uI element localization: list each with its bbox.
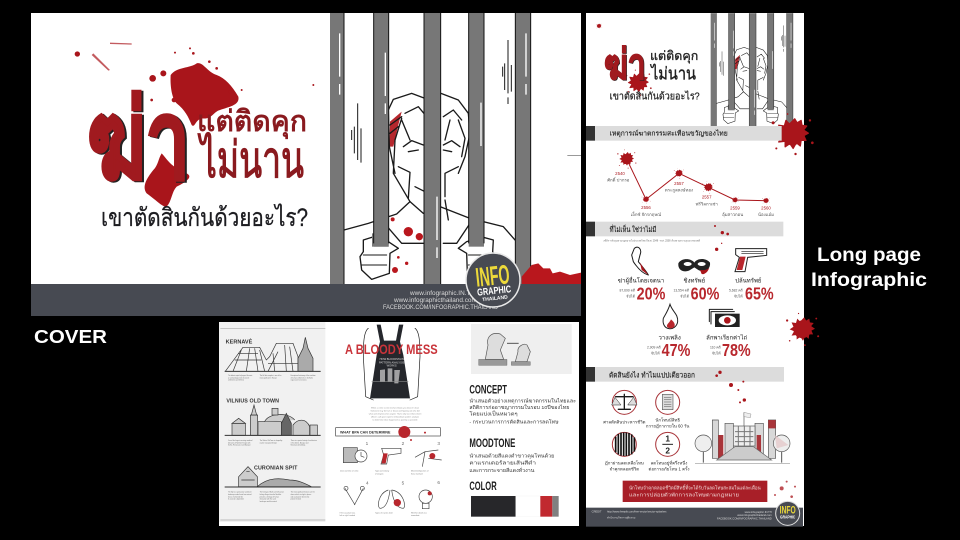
long page footer: www.infographic.IN.TH (745, 510, 772, 514)
intro text (369, 406, 422, 421)
sample: Lithuania heritage sites: One of the largest surviving medieval (228, 439, 253, 442)
sample: a bloody mess: immediate (411, 514, 419, 517)
sample: a bloody mess: 1 (366, 441, 369, 446)
hero title kill: ฆ่า (604, 40, 646, 87)
illustration: prison building (695, 412, 790, 463)
stat: armed robbery: 65% (745, 283, 774, 303)
caption: life sentence: จำคุกตลอดชีวิต (610, 466, 639, 472)
long page footer (586, 501, 803, 527)
stat: armed robbery (729, 277, 774, 303)
icon: mask (678, 259, 710, 274)
moodtone text: และการกระจายสีแดงทั่วงาน (469, 467, 535, 474)
sample: Lithuania heritage sites (219, 322, 325, 522)
cover logo badge: GRAPHIC (477, 284, 512, 299)
sample: Lithuania heritage sites: most significant in Europe (260, 376, 277, 379)
stat: robbery (673, 277, 719, 303)
caption: death sentence: ศาลตัดสินประหารชีวิต (603, 419, 646, 424)
section 2 note: สถิติการจับกุมตามกฎหมายในประเทศไทย ปีพ.ศ. 2548 - พ.ศ. 2558 เรียงตามความรุนแรงของคดี (603, 239, 700, 244)
what BPA can determine bar: WHAT BPA CAN DETERMINE (340, 430, 391, 434)
stat: arson: 2,909 คดี (647, 344, 661, 349)
panel: long page infographic (586, 13, 819, 527)
sample: Lithuania heritage sites: and coastal pine forests that (291, 495, 310, 498)
sample: a bloody mess: left or right handed (340, 514, 355, 517)
intro text: Someone may be hurt or dead, and figuring out who did (371, 409, 419, 412)
color heading: COLOR (469, 479, 497, 493)
sample: Lithuania heritage sites: old towns of Northern Europe with (228, 441, 251, 444)
cover title: line 2: ไม่นาน (197, 132, 304, 188)
sample: Lithuania heritage sites: interaction with the sand (260, 498, 276, 501)
sample: Lithuania heritage sites: forces of wind and tide (228, 495, 243, 498)
intro text: When a crime scene involves blood, you know it's bad. (371, 406, 419, 409)
intro text: to determine what happened as quickly as possible (373, 418, 418, 421)
Curonian illustration (225, 467, 321, 487)
concept text: นำเสนอตัวอย่างเหตุการณ์ฆาตกรรมในไทยและ (469, 398, 576, 405)
sample: a bloody mess: HOW BLOODSTAIN (380, 357, 404, 361)
Vilnius illustration (232, 405, 317, 435)
colour swatches (471, 496, 559, 517)
sample: Lithuania heritage sites: period is a heritage of human (260, 495, 279, 498)
concept text: สถิติการก่ออาชญากรรมในรอบ 10ปีของไทย (469, 404, 569, 411)
Kernave heading: KERNAVĖ (226, 338, 253, 345)
intro text: what and why becomes urgent. That's why law enforcement (369, 412, 422, 415)
sample: Lithuania heritage sites: The heritage of Baltic and Lithuanian (260, 491, 284, 494)
sample: a bloody mess: those involved (411, 472, 423, 475)
section 2 header: ที่ไม่เห็น ใช่ว่าไม่มี (610, 224, 656, 234)
stat: armed robbery: จับได้ (734, 294, 743, 299)
sample: a bloody mess: PATTERN ANALYSIS (379, 360, 405, 364)
Vilnius heading: VILNIUS OLD TOWN (226, 399, 279, 405)
long page footer: CREDIT (592, 509, 602, 513)
sample: Lithuania heritage sites: The hill fort complex is one of the (260, 374, 282, 377)
Kernave illustration (225, 337, 321, 371)
what BPA can determine bar (336, 426, 440, 441)
concept text (469, 398, 576, 426)
long page footer: http://www.freepik.com/free-vector/vector-splashes (607, 509, 667, 513)
cover logo badge (466, 253, 520, 307)
label: long page infographic (811, 244, 927, 291)
section 1 header (586, 126, 782, 141)
timeline line chart: 2556 (641, 205, 651, 210)
sample: Lithuania heritage sites: protect the land (291, 498, 301, 501)
sample: Lithuania heritage sites: eastern european lifestyle (260, 441, 277, 444)
stat: extortion: 110 คดี (710, 344, 721, 349)
sample: Lithuania heritage sites: landscape under threat from natural (228, 493, 252, 496)
section 3: sentencing (586, 367, 803, 527)
label: cover: COVER (34, 327, 107, 347)
long page footer: www.infographicthailand.com (737, 513, 772, 517)
hero title kill: ฆ่า (605, 41, 646, 88)
icon: flame (663, 304, 678, 329)
sample: Lithuania heritage sites: fishing villages from the Neolithic (260, 493, 282, 496)
icon: knife (632, 247, 648, 275)
sample: Lithuania heritage sites: Exceptional testimony of the evolution (291, 374, 316, 377)
icon: document (656, 390, 680, 414)
timeline line chart: ฟรีวิลกาเซ่า (695, 201, 718, 206)
concept thumbnail (471, 324, 572, 374)
sample: a bloody mess: Movement/position of (411, 470, 429, 473)
cover title bloodstains (75, 43, 314, 207)
hero prisoner illustration (711, 13, 793, 127)
callout: red conclusion box (623, 481, 767, 502)
label: long page infographic: Long page (817, 244, 921, 266)
sample: a bloody mess: WORKS (387, 364, 397, 368)
section 1: timeline (586, 126, 782, 218)
icon: one half (656, 432, 680, 456)
stat: extortion: จับได้ (712, 350, 721, 355)
stat: extortion: ลักพาเรียกค่าไถ่ (706, 333, 748, 341)
stat: murder: ฆ่าผู้อื่นโดยเจตนา (618, 277, 664, 285)
sample: Lithuania heritage sites: The Spit is a spectacular sand dune (228, 491, 252, 494)
timeline line chart: 2557 (674, 181, 684, 186)
sample: Lithuania heritage sites: The most significant features are the (291, 491, 315, 494)
cover footer links: www.infographicthailand.com (393, 297, 477, 304)
icon: prison bars (612, 432, 636, 456)
caption: life sentence: ฎีกาผ่านลดเหลือโทษ (605, 459, 644, 465)
section 1 header: เหตุการณ์ฆาตกรรมสะเทือนขวัญของไทย (610, 129, 728, 137)
cover title: line 1: แต่ติดคุก (197, 106, 307, 139)
section 2: statistics (586, 222, 819, 360)
caption: reduced sentence (649, 459, 689, 471)
stat: armed robbery: ปล้นทรัพย์ (735, 277, 761, 285)
stat: murder: 87,690 คดี (619, 288, 635, 293)
cover subtitle: เขาตัดสินกันด้วยอะไร? (101, 203, 308, 232)
timeline line chart: 2557 (702, 195, 712, 200)
timeline line chart (607, 149, 774, 218)
cover footer links: www.infographic.IN.TH (409, 290, 475, 297)
caption: life sentence (605, 459, 644, 472)
stat: robbery: 13,554 คดี (673, 288, 689, 293)
sample: Lithuania heritage sites: landscape and the natural (260, 500, 277, 503)
sample: a bloody mess: If the assailant was (340, 511, 355, 514)
concept text: โดยแบ่งเป็นหมวดๆ (469, 409, 518, 417)
sample: Lithuania heritage sites: an archaeological site of ancient (228, 376, 250, 379)
concept text: - กระบวนการการตัดสินและการลดโทษ (469, 419, 559, 426)
cover footer links: FACEBOOK.COM/INFOGRAPHIC.THAILAND (383, 304, 498, 311)
Curonian heading: CURONIAN SPIT (254, 466, 298, 472)
callout: red conclusion box: และการปล่อยตัวพักการลงโทษตามกฎหมาย (629, 491, 739, 498)
cover title: kill: ฆ่า (87, 79, 190, 202)
section 2 header (586, 222, 783, 236)
intro text: officers call upon experts in bloodstain pattern analysis (371, 415, 419, 418)
icon: one half: 1 (665, 434, 670, 444)
timeline line chart: ศักดิ์ ปากรอ (607, 176, 630, 182)
footer logo badge (776, 501, 800, 525)
timeline line chart: ตระกูลหงษ์ทอง (665, 188, 693, 194)
sample: Lithuania heritage sites: region over 10 centuries (291, 379, 307, 382)
hero title line 1: แต่ติดคุก (650, 49, 698, 64)
hero splatter (596, 23, 814, 155)
sample: Lithuania heritage sites: There is a special variety of architecture (291, 439, 317, 442)
BPA icons grid (343, 448, 442, 509)
bloody mess title: A BLOODY MESS (345, 341, 438, 357)
sample: a bloody mess: Types of injuries dealt (375, 511, 393, 514)
sample: Lithuania heritage sites: Neoclassical buildings (291, 445, 306, 447)
sample: Lithuania heritage sites: The oldest capital of pagan Lithuania (228, 374, 252, 377)
sample: Lithuania heritage sites: dunes which rise high in places (291, 493, 311, 496)
cover footer links (383, 290, 498, 311)
sample: Lithuania heritage sites: The Vilnius Old Town is shaped by (260, 440, 283, 442)
stat: arson: วางเพลิง (659, 334, 681, 341)
stat: arson: 47% (662, 340, 690, 360)
sample: a bloody mess: Whether death was (411, 511, 427, 514)
stat: extortion: 78% (722, 340, 751, 360)
long page hero (596, 13, 814, 155)
moodtone heading: MOODTONE (469, 436, 515, 450)
icon: one half: 2 (665, 445, 670, 455)
long page footer: สำนักงานกิจการยุติธรรม (607, 515, 636, 520)
sample: a bloody mess: 6 (437, 480, 440, 485)
sample: a bloody mess: Date and time of crime (340, 470, 358, 473)
sample: Lithuania heritage sites: settlements and hill forts (228, 379, 244, 382)
timeline line chart: 2560 (761, 205, 771, 210)
stat: murder: จับได้ (626, 294, 636, 299)
section 3 header: ตัดสินยังไง ทำไมแปปเดียวออก (609, 370, 695, 379)
sample: a bloody mess: 2 (402, 441, 405, 446)
side splatter (786, 313, 819, 346)
cover illustration: prisoner behind bars (330, 10, 581, 287)
apron illustration (363, 325, 420, 400)
stat: murder (618, 277, 665, 303)
panel: sample works (219, 322, 579, 526)
stat: extortion (706, 333, 751, 360)
sample: a bloody mess: 3 (437, 441, 440, 446)
caption: royal pardon (646, 417, 689, 429)
cover footer bar (31, 284, 581, 316)
moodtone text (469, 452, 554, 474)
stat: murder: 20% (637, 283, 665, 303)
hero title line 2: ไม่นาน (649, 63, 696, 83)
stat: arson (647, 334, 690, 360)
caption: royal pardon: นักโทษมีสิทธิ (655, 417, 680, 423)
sample: a bloody mess: of weapon (375, 473, 383, 475)
footer logo badge: GRAPHIC (780, 514, 796, 519)
caption: reduced sentence: ต่อการอภัยโทษ 1 ครั้ง (649, 465, 689, 471)
sample: a bloody mess: Type and velocity (375, 470, 389, 473)
cover title: kill: ฆ่า (89, 80, 192, 203)
long page footer: FACEBOOK.COM/INFOGRAPHIC.THAILAND (717, 516, 772, 520)
sample: a bloody mess (336, 325, 442, 517)
cover logo badge: INFO (474, 259, 511, 293)
label: long page infographic: Infographic (811, 269, 927, 291)
stat: robbery: 60% (691, 283, 719, 303)
moodtone text: นำเสนอด้วยสีแดงดำขาวคุมโทนด้วย (469, 452, 554, 459)
caption: royal pardon: ถวายฎีกาภายใน 60 วัน (646, 424, 689, 429)
stat: arson: จับได้ (651, 350, 660, 355)
sample: concept and moodtone (469, 324, 576, 517)
concept heading: CONCEPT (469, 382, 507, 396)
timeline line chart: 2559 (730, 205, 740, 210)
hero subtitle: เขาตัดสินกันด้วยอะไร? (610, 90, 700, 102)
stat: robbery: จับได้ (680, 294, 690, 299)
stat: armed robbery: 5,682 คดี (729, 288, 743, 293)
icon: banknotes (709, 309, 740, 327)
footer logo badge: INFO (780, 504, 796, 516)
panel: cover (31, 10, 581, 316)
icon: pistol (735, 249, 767, 272)
sample: a bloody mess: 4 (366, 481, 369, 486)
cover logo badge: THAILAND (482, 295, 508, 303)
timeline line chart: อุ้มสาวกอน (722, 212, 743, 218)
timeline line chart: น้องแอ๋ม (758, 212, 774, 217)
stat: robbery: ชิงทรัพย์ (684, 277, 705, 285)
sample: Lithuania heritage sites: in the district. Baroque and (291, 441, 308, 444)
sample: a bloody mess: 5 (402, 481, 405, 486)
timeline line chart: เอ็กซ์ จักรกฤษณ์ (631, 210, 661, 217)
sample: Lithuania heritage sites: of human settlements in the Baltic (291, 376, 313, 379)
timeline line chart: 2540 (615, 171, 625, 176)
sample: Lithuania heritage sites: Its survival is dependent (228, 498, 245, 501)
callout: red conclusion box: นักโทษจำคุกตลอดชีวิตมีสิทธิ์ที่จะได้รับวันลดโทษสะสมในแต่ละเดือน (629, 484, 761, 492)
section 3 header (586, 367, 784, 382)
moodtone text: คาแรกเตอร์ลายเส้นสีดำ (469, 460, 536, 467)
sample: Lithuania heritage sites: Gothic, Renaissance and Baroque (228, 444, 251, 447)
caption: reduced sentence: ลดโทษอยู่ที่ครึ่งหนึ่ง (651, 459, 687, 466)
icon: scales (612, 390, 637, 414)
